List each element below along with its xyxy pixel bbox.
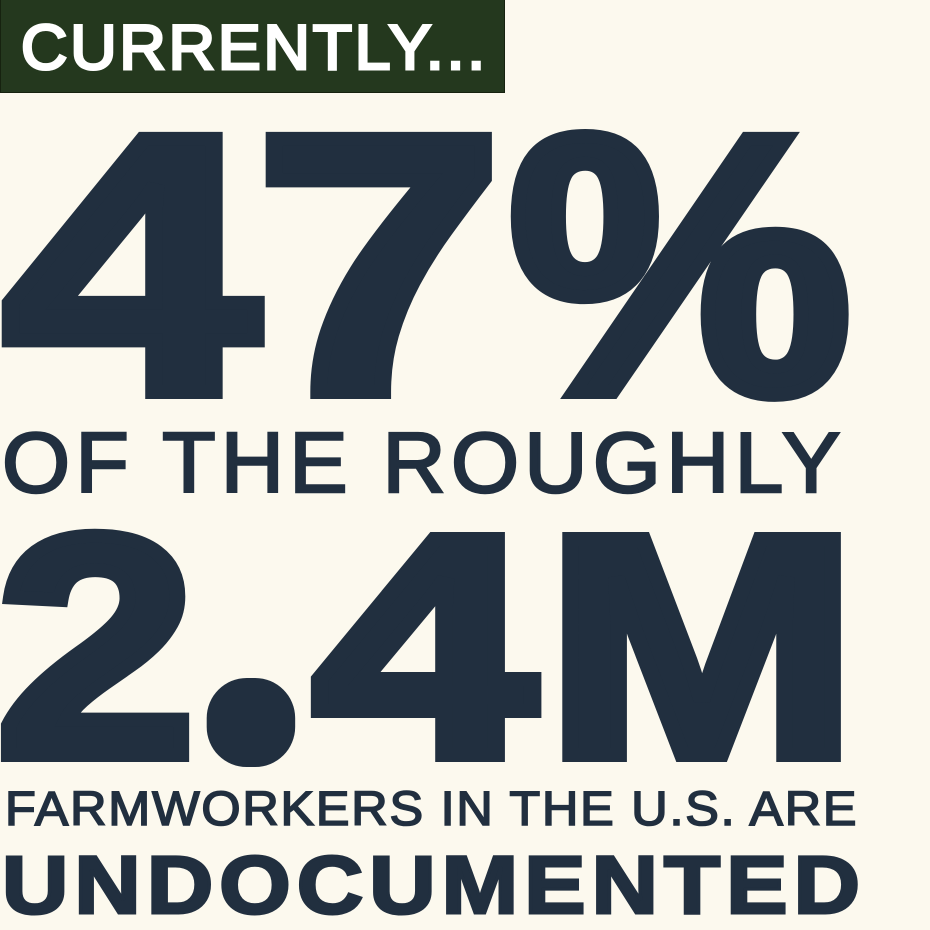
big statistic: 2.4M: . <box>243 673 259 740</box>
text: farmworkers in the U.S. are: FARMWORKERS IN THE U.S. ARE <box>5 782 857 836</box>
heading: currently: CURRENTLY... <box>21 13 485 83</box>
big statistic: 2.4M: M <box>546 471 858 822</box>
text: of the roughly: OF THE ROUGHLY <box>2 416 840 511</box>
big statistic: 2.4M <box>0 471 858 822</box>
emphasis: undocumented: UNDOCUMENTED <box>2 840 860 930</box>
big statistic: 2.4M: 2 <box>0 471 196 822</box>
big statistic: 47%: % <box>508 59 852 470</box>
big statistic: 2.4M: 4 <box>314 471 537 822</box>
big statistic: 47%: 4 <box>4 59 261 470</box>
big statistic: 47% <box>4 59 852 470</box>
big statistic: 47%: 7 <box>255 59 503 470</box>
heading: currently <box>0 0 504 92</box>
